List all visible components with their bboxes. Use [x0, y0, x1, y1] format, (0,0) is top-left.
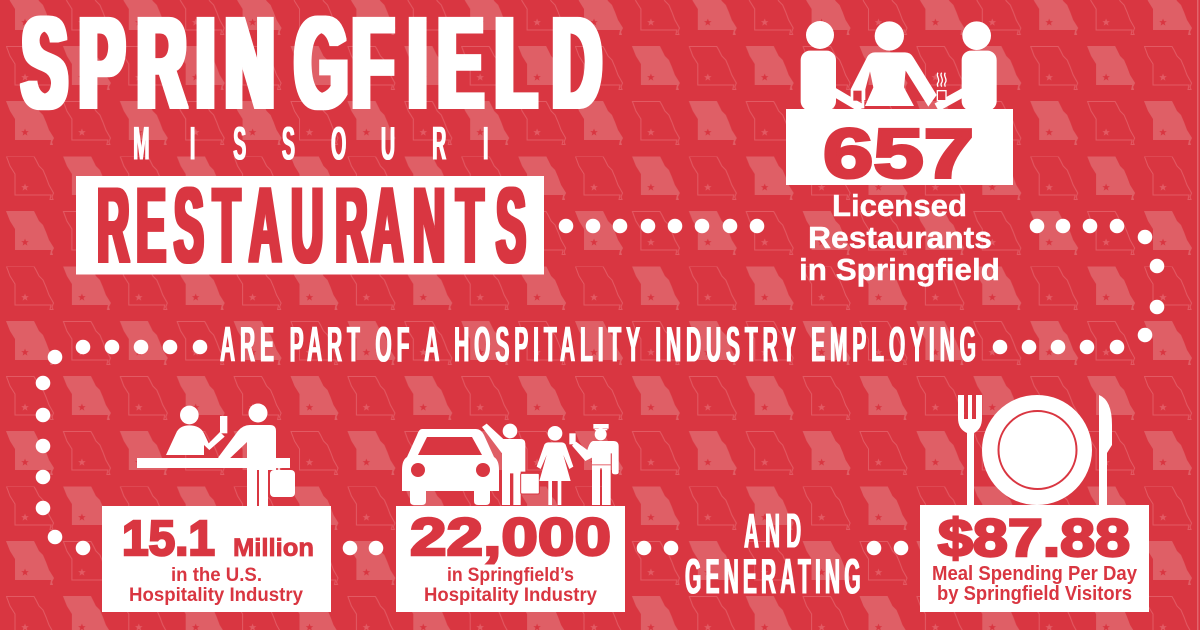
icon: hotel reception desk: [137, 404, 295, 506]
stat box: 22,000: [396, 506, 625, 612]
stat box: $87.88: [920, 505, 1149, 612]
stat box: 657: [786, 109, 1013, 192]
text: and generating: [685, 503, 861, 605]
icon: valet with cap and card: [569, 424, 619, 505]
stat box: 15.1 Million: [102, 506, 331, 612]
subtitle: Missouri: MISSOURI: [133, 116, 488, 170]
stat box: 22,000: Hospitality Industry: [424, 584, 597, 606]
stat box: 15.1 Million: 15.1: [122, 512, 215, 566]
stat box: $87.88: $87.88: [938, 509, 1130, 568]
icon: three people dining at a table: [801, 21, 997, 111]
icon: car: [402, 429, 499, 505]
dotted connector: right curve: [993, 219, 1164, 354]
dotted connector: left curve: [36, 340, 207, 555]
stat box: $87.88: Meal Spending Per Day: [932, 563, 1138, 585]
banner text: are part of a hospitality industry employing: ARE PART OF A HOSPITALITY INDUSTRY EMPLOYING: [220, 317, 976, 373]
dotted connector: top row: [559, 219, 764, 233]
text: Licensed Restaurants in Springfield: in Springfield: [799, 252, 1000, 287]
text: and generating: AND: [744, 503, 801, 558]
text: Licensed Restaurants in Springfield: [799, 188, 1000, 287]
icon: woman in dress: [537, 426, 573, 505]
stat box: 15.1 Million: Million: [233, 534, 314, 562]
dotted connector: between stat boxes: [343, 541, 908, 555]
stat box: $87.88: by Springfield Visitors: [937, 583, 1132, 605]
text: and generating: GENERATING: [685, 549, 861, 605]
text: Licensed Restaurants in Springfield: Restaurants: [808, 220, 992, 255]
heading box: Restaurants: RESTAURANTS: [97, 167, 526, 286]
stat box: 657: 657: [823, 114, 974, 192]
stat box: 22,000: 22,000: [410, 508, 611, 567]
stat box: 15.1 Million: Hospitality Industry: [129, 584, 303, 606]
stat box: 15.1 Million: in the U.S.: [171, 564, 262, 586]
text: Licensed Restaurants in Springfield: Licensed: [832, 188, 967, 223]
icon: fork, plate and knife: [958, 395, 1112, 505]
icon: car with guests and valet: [402, 424, 619, 505]
stat box: 22,000: in Springfield’s: [447, 564, 574, 586]
icon: guest waving with briefcase: [482, 424, 539, 505]
